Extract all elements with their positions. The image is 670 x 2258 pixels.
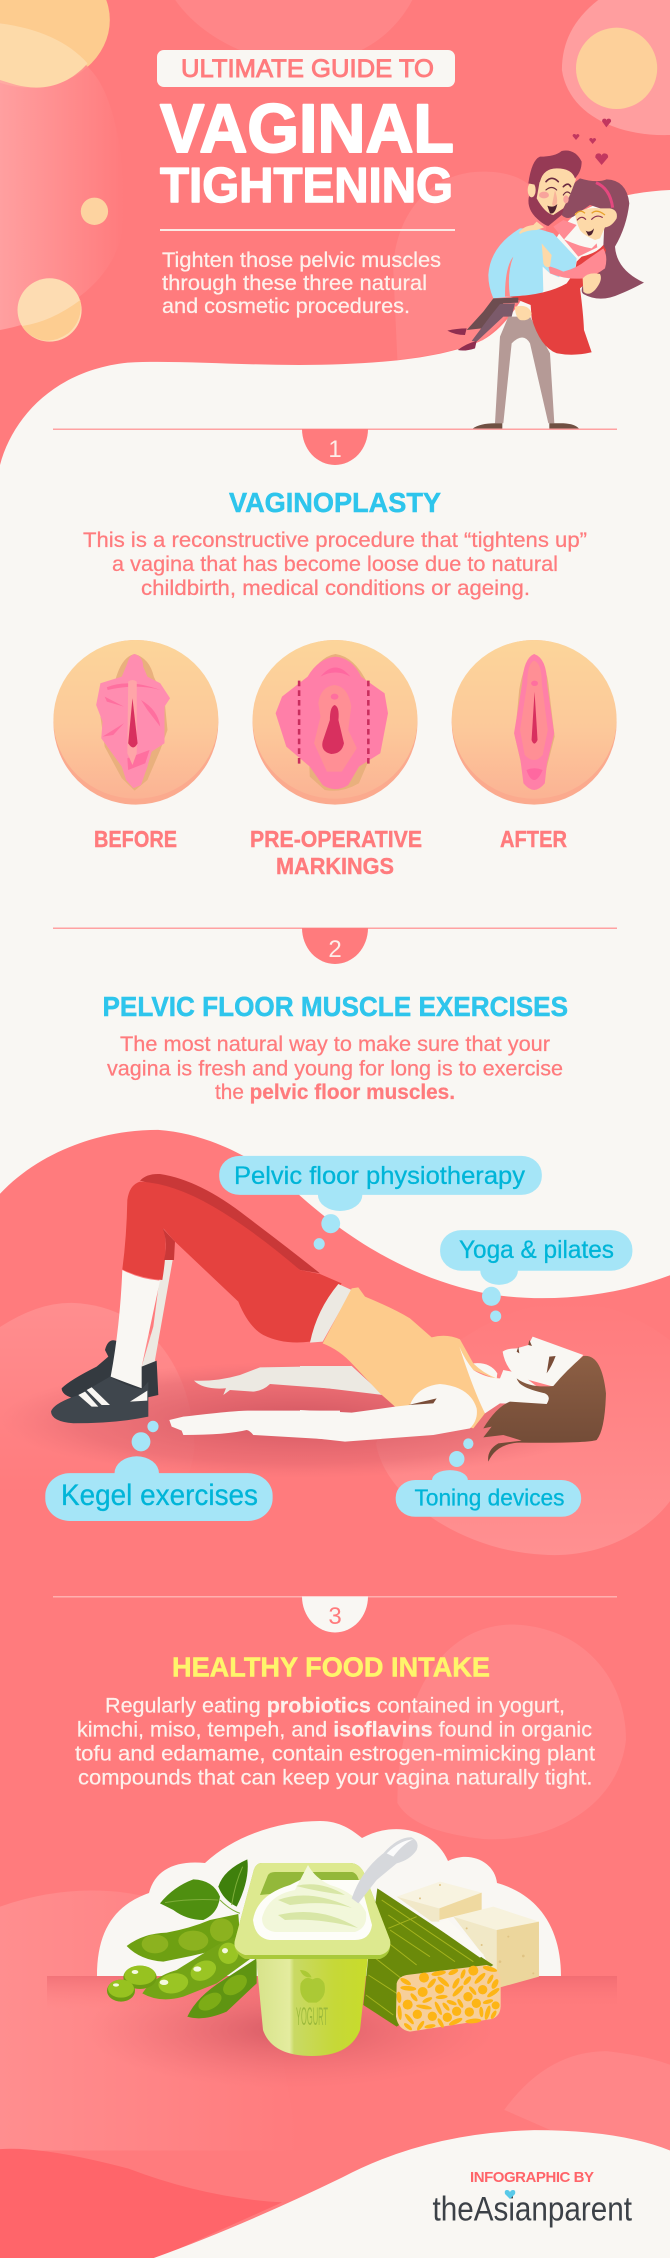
pink background for lower sections: [0, 1130, 670, 2258]
woman's arm: [548, 248, 606, 279]
food description: kimchi, miso, tempeh, and isoflavins found in organic: [77, 1718, 592, 1742]
food section background shapes: [0, 1624, 670, 2155]
pelvic floor description: vagina is fresh and young for long is to exercise: [107, 1058, 563, 1080]
vaginoplasty description: This is a reconstructive procedure that “tightens up”: [83, 529, 587, 552]
hearts: [573, 119, 611, 165]
icon: couple embracing: [447, 151, 644, 429]
hair: [483, 1356, 606, 1462]
section 3 divider: [53, 1596, 617, 1632]
food shadow: [47, 1972, 617, 2088]
woman's head: [575, 208, 617, 240]
woman's shoulder: [553, 220, 597, 257]
callout labels: Yoga & pilates: [459, 1236, 614, 1264]
illustration: yogurt cup: [234, 1837, 418, 2056]
food description: compounds that can keep your vagina naturally tight.: [78, 1766, 592, 1789]
near shoe: [51, 1377, 148, 1423]
header background with waves and circles: [0, 0, 670, 465]
cup lid: [234, 1863, 390, 1959]
footer waves: [0, 2130, 670, 2258]
illustration: woman doing pelvic bridge, legs: [51, 1174, 342, 1440]
credit: infographic by: INFOGRAPHIC BY: [470, 2169, 594, 2186]
intro text: [162, 248, 441, 318]
callout labels: Toning devices: [414, 1484, 564, 1510]
diagram: after: [452, 640, 617, 805]
intro text: and cosmetic procedures.: [162, 294, 410, 318]
pod: lower: [187, 1958, 257, 2018]
man's sweater: [488, 228, 577, 298]
pod: top: [127, 1914, 240, 1962]
tempeh block: [396, 1965, 501, 2032]
far shoe: [62, 1340, 158, 1398]
callout labels: Kegel exercises: [61, 1479, 258, 1512]
illustration: woman doing pelvic bridge, torso and head: [300, 1284, 606, 1462]
man's shoes: [473, 423, 579, 429]
pelvic floor description: the pelvic floor muscles.: [215, 1081, 455, 1104]
section 2 divider: [53, 928, 617, 964]
title: [160, 90, 454, 213]
tempeh wrapper: [363, 1888, 493, 2027]
tofu front block: [419, 1884, 539, 1988]
man's shirt: [563, 225, 595, 258]
diagram labels: PRE-OPERATIVE: [250, 826, 422, 852]
near sock: [111, 1270, 160, 1388]
loose beans: [107, 1966, 157, 2002]
heading: pelvic floor muscle exercises: PELVIC FLOOR MUSCLE EXERCISES: [102, 991, 568, 1022]
callout bubble: kegel exercises: [45, 1421, 273, 1521]
man's head: [528, 180, 573, 226]
illustration: yogurt cup: YOGURT: [296, 2003, 328, 2031]
leaves: [160, 1859, 248, 1920]
food description: [75, 1694, 595, 1789]
far arm: [194, 1366, 340, 1395]
intro text: through these three natural: [162, 271, 427, 295]
near hand: [169, 1411, 340, 1440]
far arm: [300, 1366, 383, 1395]
vaginoplasty description: childbirth, medical conditions or ageing.: [141, 577, 530, 600]
man's legs: [495, 317, 554, 423]
spoon: [352, 1837, 418, 1903]
woman's legs: [467, 298, 518, 330]
tofu back block: [397, 1882, 482, 1922]
illustration: edamame and leaves: [107, 1859, 257, 2018]
callout labels: [61, 1162, 614, 1512]
title rule: [160, 229, 455, 231]
diagram: pre-operative markings: [253, 640, 417, 805]
logo: theAsianparent: theAsianparent: [432, 2190, 632, 2228]
vaginoplasty description: a vagina that has become loose due to natural: [112, 553, 558, 576]
heading: vaginoplasty: VAGINOPLASTY: [229, 487, 441, 518]
title: VAGINAL: [160, 90, 454, 167]
far sock: [142, 1260, 173, 1367]
food description: Regularly eating probiotics contained in yogurt,: [105, 1694, 565, 1718]
cup body: [256, 1957, 368, 2056]
lid well: [260, 1872, 360, 1895]
intro text: Tighten those pelvic muscles: [162, 248, 441, 272]
section 1 divider: [53, 428, 617, 465]
woman's dress: [510, 245, 606, 355]
heading: healthy food intake: HEALTHY FOOD INTAKE: [172, 1651, 490, 1682]
leggings: [122, 1182, 342, 1342]
diagram: before: [53, 640, 218, 805]
title: TIGHTENING: [160, 159, 453, 213]
yogurt cream: [253, 1865, 372, 1940]
leggings shadow: [140, 1174, 320, 1273]
section 2 divider: 2: [328, 936, 342, 963]
callouts: [45, 1156, 632, 1521]
diagram labels: BEFORE: [94, 826, 177, 852]
section 3 divider: 3: [328, 1603, 342, 1630]
callout labels: Pelvic floor physiotherapy: [234, 1162, 525, 1190]
woman's long hair: [562, 178, 644, 299]
face: [503, 1337, 583, 1387]
near arm: [300, 1384, 477, 1442]
neck and chest: [459, 1347, 550, 1413]
pill heading: ultimate guide to: [157, 50, 455, 87]
apple logo: [300, 1970, 325, 2003]
callout bubble: toning devices: [396, 1438, 581, 1517]
illustration: tofu and tempeh: [363, 1882, 539, 2032]
diagram labels: AFTER: [500, 826, 567, 852]
man's hand on shoulder: [519, 222, 544, 234]
waistband: [310, 1284, 352, 1343]
section 1 divider: 1: [328, 436, 342, 463]
pod: open with beans: [142, 1937, 253, 1999]
food description: tofu and edamame, contain estrogen-mimicking plant: [75, 1742, 595, 1765]
diagrams: before, pre-operative, after: [53, 640, 617, 805]
floor shadow: [0, 1362, 600, 1478]
diagram labels: [94, 826, 567, 879]
top: [323, 1287, 498, 1428]
diagram labels: MARKINGS: [276, 853, 394, 879]
callout bubble: yoga and pilates: [440, 1230, 632, 1322]
pelvic floor description: The most natural way to make sure that your: [120, 1033, 550, 1056]
pill heading: ultimate guide to: ULTIMATE GUIDE TO: [181, 55, 434, 83]
white cloud behind food: [97, 1821, 561, 1976]
callout bubble: pelvic floor physiotherapy: [219, 1156, 542, 1250]
pelvic floor description: [107, 1033, 563, 1104]
vaginoplasty description: [83, 529, 587, 600]
hands: [515, 243, 601, 320]
